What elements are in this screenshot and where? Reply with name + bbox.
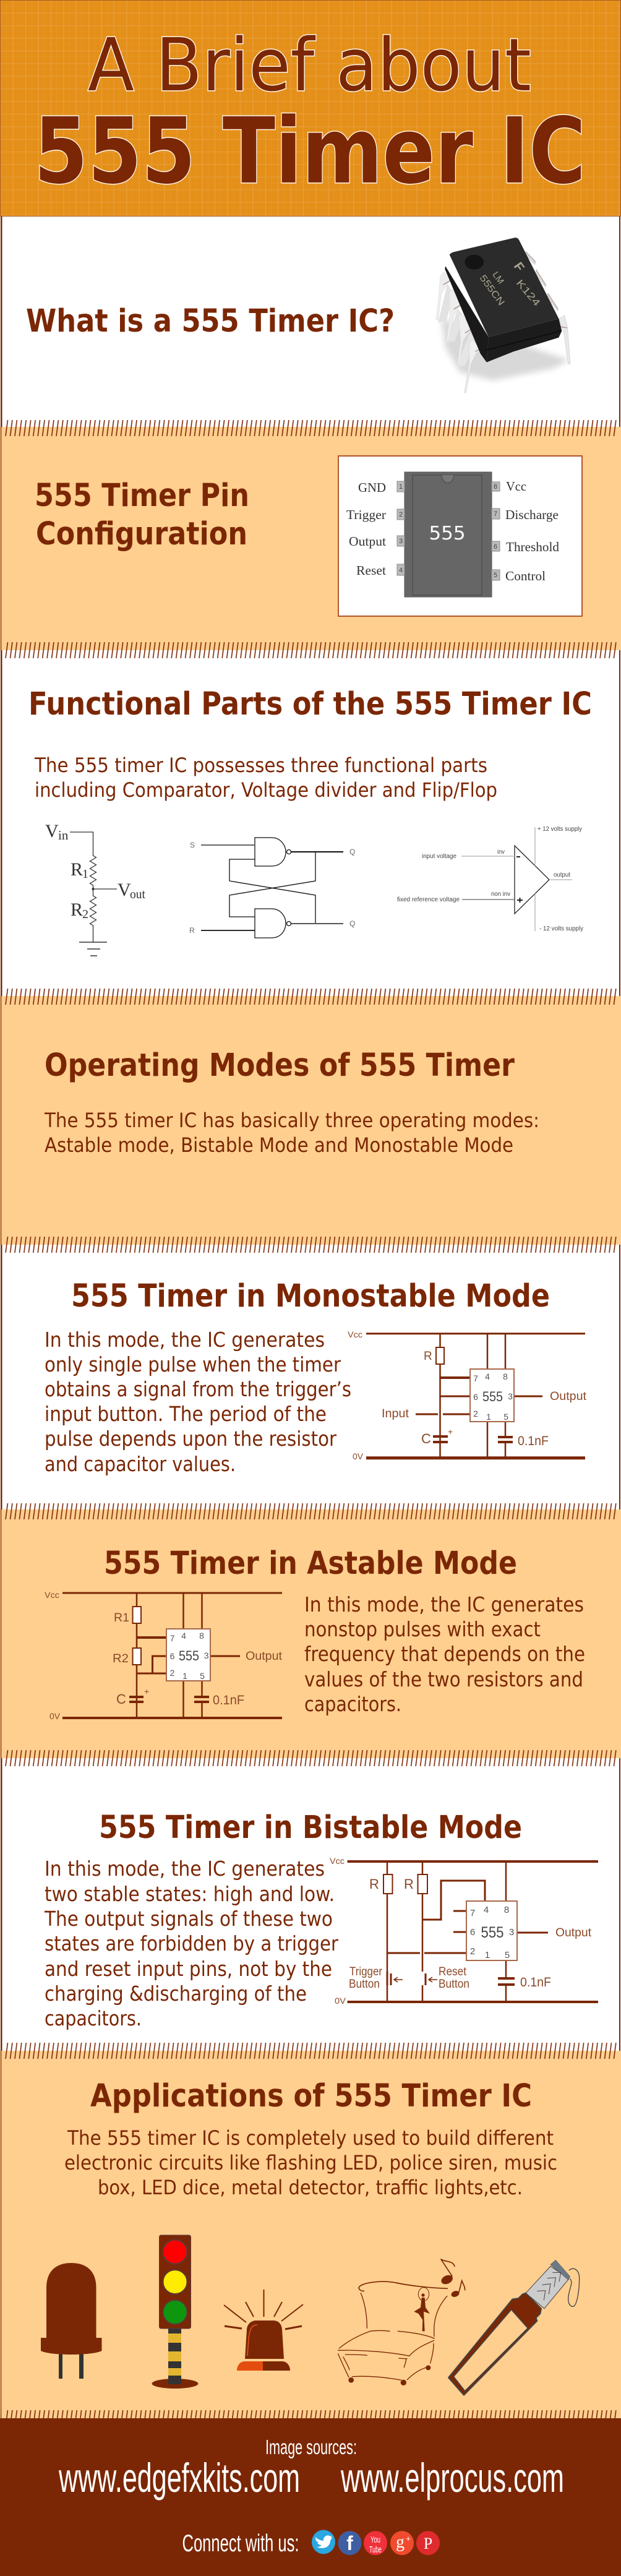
icon: google plus: + bbox=[406, 2534, 411, 2543]
diagram: astable circuit: Output bbox=[246, 1650, 283, 1663]
text: monostable description: obtains a signal from the trigger’s bbox=[45, 1377, 351, 1401]
diagram: voltage divider: 1 bbox=[82, 867, 88, 881]
diagram: monostable circuit: 4 bbox=[485, 1372, 490, 1381]
diagram: monostable circuit: 1 bbox=[486, 1412, 491, 1422]
diagram: astable circuit: 4 bbox=[181, 1631, 186, 1641]
diagram: voltage divider: in bbox=[58, 828, 69, 843]
diagram: flip flop bbox=[189, 838, 355, 938]
text: bistable description bbox=[44, 1857, 338, 2030]
text: bistable description: capacitors. bbox=[45, 2006, 142, 2030]
diagram: astable circuit: R1 bbox=[114, 1612, 129, 1625]
heading: applications: Applications of 555 Timer IC bbox=[90, 2078, 532, 2114]
pins bbox=[397, 481, 500, 580]
panel: pin diagram: 1 bbox=[399, 483, 403, 491]
diagram: voltage divider: R bbox=[71, 859, 83, 880]
pin labels bbox=[346, 479, 559, 583]
diagram: flip flop: S bbox=[190, 841, 195, 849]
icon: facebook: f bbox=[346, 2532, 353, 2554]
diagram: bistable circuit: 2 bbox=[470, 1946, 475, 1957]
pin labels: Output bbox=[349, 534, 386, 549]
text: operating modes description: The 555 timer IC has basically three operating modes: bbox=[44, 1109, 539, 1132]
heading: operating modes: Operating Modes of 555 Timer bbox=[45, 1047, 515, 1084]
diagram: bistable circuit: Output bbox=[555, 1926, 592, 1939]
text: monostable description: input button. The period of the bbox=[45, 1402, 327, 1426]
diagram: bistable circuit: Reset bbox=[439, 1965, 467, 1978]
panel: pin diagram: 3 bbox=[399, 538, 403, 545]
icon: LED bbox=[41, 2263, 101, 2379]
heading: monostable mode: 555 Timer in Monostable Mode bbox=[71, 1278, 550, 1315]
diagram: astable circuit bbox=[45, 1590, 283, 1721]
text: functional parts description: The 555 timer IC possesses three functional parts bbox=[34, 753, 487, 777]
diagram: astable circuit: 7 bbox=[170, 1633, 175, 1643]
diagram: monostable circuit: + bbox=[448, 1427, 453, 1436]
diagram: astable circuit: 6 bbox=[170, 1651, 175, 1661]
diagram: astable circuit: 5 bbox=[200, 1671, 205, 1681]
icon: pinterest: P bbox=[424, 2535, 432, 2552]
icon: google plus bbox=[390, 2531, 414, 2555]
diagram: comparator: + 12 volts supply bbox=[537, 826, 582, 833]
icon: metal detector bbox=[448, 2260, 580, 2395]
diagram: voltage divider: V bbox=[118, 880, 131, 900]
diagram: bistable circuit bbox=[330, 1856, 598, 2006]
diagram: monostable circuit: 555 bbox=[482, 1389, 503, 1404]
icon: youtube: You bbox=[370, 2535, 380, 2545]
heading: what is a 555 timer: What is a 555 Timer IC? bbox=[26, 303, 395, 340]
text: applications description bbox=[64, 2126, 557, 2199]
diagram: monostable circuit: C bbox=[421, 1431, 431, 1446]
diagram: comparator: output bbox=[554, 872, 570, 878]
diagram: bistable circuit: Vcc bbox=[330, 1856, 345, 1866]
text: astable description: nonstop pulses with exact bbox=[304, 1617, 541, 1641]
heading: astable mode: 555 Timer in Astable Mode bbox=[104, 1545, 517, 1582]
heading: pin configuration: 555 Timer Pin bbox=[35, 478, 249, 514]
icon: 555 chip photo: F bbox=[511, 260, 527, 274]
diagram: bistable circuit: R bbox=[404, 1876, 414, 1892]
text: bistable description: The output signals of these two bbox=[44, 1907, 333, 1931]
text: bistable description: In this mode, the IC generates bbox=[45, 1857, 325, 1881]
pin labels: Trigger bbox=[346, 507, 386, 522]
diagram: astable circuit: 3 bbox=[204, 1651, 209, 1660]
diagram: comparator: inv bbox=[497, 849, 505, 856]
diagram: flip flop: Q bbox=[349, 919, 355, 928]
diagram: flip flop: Q bbox=[349, 848, 355, 856]
icon: 555 chip photo: LM bbox=[490, 270, 505, 286]
panel: pin diagram: 8 bbox=[494, 483, 497, 491]
diagram: voltage divider: 2 bbox=[82, 908, 88, 921]
diagram: monostable circuit: 0V bbox=[353, 1451, 364, 1461]
diagram: bistable circuit: R bbox=[369, 1876, 379, 1892]
diagram: bistable circuit: Button bbox=[349, 1978, 380, 1991]
icon: pinterest bbox=[416, 2531, 440, 2555]
heading: pin configuration: Configuration bbox=[36, 516, 247, 552]
text: bistable description: two stable states: high and low. bbox=[45, 1882, 335, 1906]
text: monostable description: pulse depends upon the resistor bbox=[45, 1427, 336, 1451]
text: applications description: electronic circuits like flashing LED, police siren, music bbox=[64, 2151, 557, 2175]
diagram: astable circuit: Vcc bbox=[45, 1590, 59, 1600]
text: monostable description bbox=[45, 1328, 351, 1476]
text: bistable description: states are forbidden by a trigger bbox=[45, 1931, 338, 1956]
text: operating modes description: Astable mode, Bistable Mode and Monostable Mode bbox=[45, 1133, 513, 1157]
pin labels: Reset bbox=[356, 563, 386, 578]
text: astable description: frequency that depends on the bbox=[304, 1642, 585, 1666]
text: astable description: capacitors. bbox=[304, 1692, 401, 1716]
panel: pin diagram: 4 bbox=[399, 567, 403, 574]
diagram: monostable circuit bbox=[348, 1329, 587, 1461]
diagram: comparator: non inv bbox=[491, 891, 510, 898]
icon: police siren bbox=[224, 2290, 303, 2371]
icon: google plus: g bbox=[396, 2533, 405, 2552]
text: monostable description: only single pulse when the timer bbox=[45, 1352, 341, 1376]
diagram: bistable circuit: Trigger bbox=[349, 1965, 383, 1978]
text: bistable description: charging &discharging of the bbox=[45, 1981, 307, 2006]
header banner bbox=[0, 0, 621, 217]
diagram: bistable circuit: 3 bbox=[509, 1927, 514, 1938]
diagram: voltage divider: V bbox=[45, 821, 59, 841]
text: applications description: box, LED dice, metal detector, traffic lights,etc. bbox=[98, 2176, 523, 2199]
icon: 555 chip photo: K124 bbox=[514, 278, 542, 309]
diagram: voltage divider: out bbox=[130, 887, 145, 901]
diagram: flip flop: R bbox=[189, 926, 195, 935]
diagram: comparator: input voltage bbox=[422, 853, 456, 860]
panel: pin diagram: 7 bbox=[494, 510, 497, 518]
diagram: voltage divider: R bbox=[71, 899, 83, 920]
diagram: bistable circuit: 1 bbox=[485, 1950, 490, 1960]
icon: traffic light bbox=[152, 2235, 198, 2389]
diagram: voltage divider bbox=[45, 821, 145, 956]
diagram: comparator bbox=[397, 826, 583, 932]
panel: footer bbox=[0, 2418, 621, 2576]
chip body bbox=[405, 472, 492, 597]
diagram: comparator: - 12 volts supply bbox=[539, 925, 583, 932]
pin labels: Vcc bbox=[506, 479, 526, 494]
text: applications description: The 555 timer IC is completely used to build different bbox=[67, 2126, 554, 2150]
text: astable description bbox=[304, 1592, 585, 1716]
diagram: bistable circuit: 4 bbox=[484, 1905, 489, 1915]
diagram: bistable circuit: Button bbox=[439, 1978, 469, 1991]
text: connect with us: Connect with us: bbox=[182, 2530, 299, 2557]
diagram: astable circuit: C bbox=[116, 1691, 126, 1707]
diagram: astable circuit: R2 bbox=[113, 1652, 129, 1665]
diagram: bistable circuit: 7 bbox=[470, 1908, 475, 1918]
diagram: monostable circuit: Input bbox=[382, 1407, 409, 1420]
panel: pin diagram: 5 bbox=[494, 572, 497, 579]
text: astable description: In this mode, the IC generates bbox=[304, 1592, 584, 1616]
diagram: comparator: fixed reference voltage bbox=[397, 896, 460, 903]
text: functional parts description: including Comparator, Voltage divider and Flip/Flop bbox=[35, 778, 497, 802]
diagram: monostable circuit: 8 bbox=[503, 1372, 508, 1381]
heading: pin configuration bbox=[35, 478, 249, 552]
diagram: monostable circuit: 2 bbox=[473, 1409, 478, 1419]
diagram: bistable circuit: 0V bbox=[335, 1996, 346, 2006]
diagram: astable circuit: 8 bbox=[199, 1631, 204, 1641]
diagram: astable circuit: 2 bbox=[170, 1668, 175, 1678]
icon: 555 chip photo bbox=[436, 238, 570, 393]
diagram: bistable circuit: 6 bbox=[470, 1927, 475, 1938]
text: monostable description: In this mode, the IC generates bbox=[45, 1328, 325, 1352]
diagram: astable circuit: + bbox=[144, 1686, 149, 1696]
diagram: bistable circuit: 0.1nF bbox=[520, 1975, 551, 1990]
pin labels: Control bbox=[505, 569, 546, 583]
diagram: astable circuit: 0V bbox=[49, 1711, 61, 1721]
icon: music box bbox=[338, 2259, 465, 2385]
pin labels: Discharge bbox=[505, 507, 559, 522]
icon: twitter bbox=[312, 2530, 335, 2554]
panel: pin diagram: 2 bbox=[399, 511, 403, 518]
icon: 555 chip photo: 555CN bbox=[478, 273, 507, 307]
diagram: monostable circuit: 0.1nF bbox=[518, 1434, 549, 1448]
text: monostable description: and capacitor values. bbox=[45, 1452, 236, 1476]
icon: trigger button switch bbox=[387, 1972, 437, 1985]
diagram: bistable circuit: 8 bbox=[504, 1905, 509, 1915]
link: edgefxkits: www.edgefxkits.com bbox=[58, 2455, 300, 2501]
diagram: astable circuit: 1 bbox=[182, 1671, 187, 1681]
diagram: monostable circuit: Vcc bbox=[348, 1329, 362, 1339]
diagram: monostable circuit: Output bbox=[550, 1390, 587, 1403]
diagram: monostable circuit: 5 bbox=[503, 1412, 508, 1422]
heading: bistable mode: 555 Timer in Bistable Mode bbox=[99, 1810, 522, 1846]
diagram: astable circuit: 555 bbox=[179, 1648, 199, 1664]
diagram: bistable circuit: 5 bbox=[505, 1950, 510, 1960]
icon: youtube: Tube bbox=[369, 2544, 382, 2555]
diagram: monostable circuit: 3 bbox=[508, 1391, 513, 1401]
panel: pin diagram bbox=[338, 456, 582, 616]
pin labels: GND bbox=[358, 480, 386, 495]
icon: facebook bbox=[338, 2531, 361, 2555]
text: operating modes description bbox=[44, 1109, 539, 1157]
diagram: bistable circuit: 555 bbox=[481, 1924, 503, 1941]
diagram: monostable circuit: 6 bbox=[473, 1392, 478, 1402]
panel: pin diagram: 6 bbox=[494, 543, 497, 551]
text: astable description: values of the two resistors and bbox=[304, 1667, 583, 1691]
text: bistable description: and reset input pins, not by the bbox=[45, 1957, 332, 1981]
title line 1: A Brief about bbox=[88, 22, 531, 108]
diagram: astable circuit: 0.1nF bbox=[213, 1693, 244, 1707]
icon: youtube bbox=[364, 2531, 387, 2555]
diagram: monostable circuit: R bbox=[424, 1350, 432, 1363]
text: functional parts description bbox=[34, 753, 497, 802]
diagram: monostable circuit: 7 bbox=[473, 1373, 478, 1383]
pin labels: Threshold bbox=[506, 539, 559, 554]
text: image sources: Image sources: bbox=[265, 2436, 357, 2458]
chip body: 555 bbox=[429, 523, 465, 544]
